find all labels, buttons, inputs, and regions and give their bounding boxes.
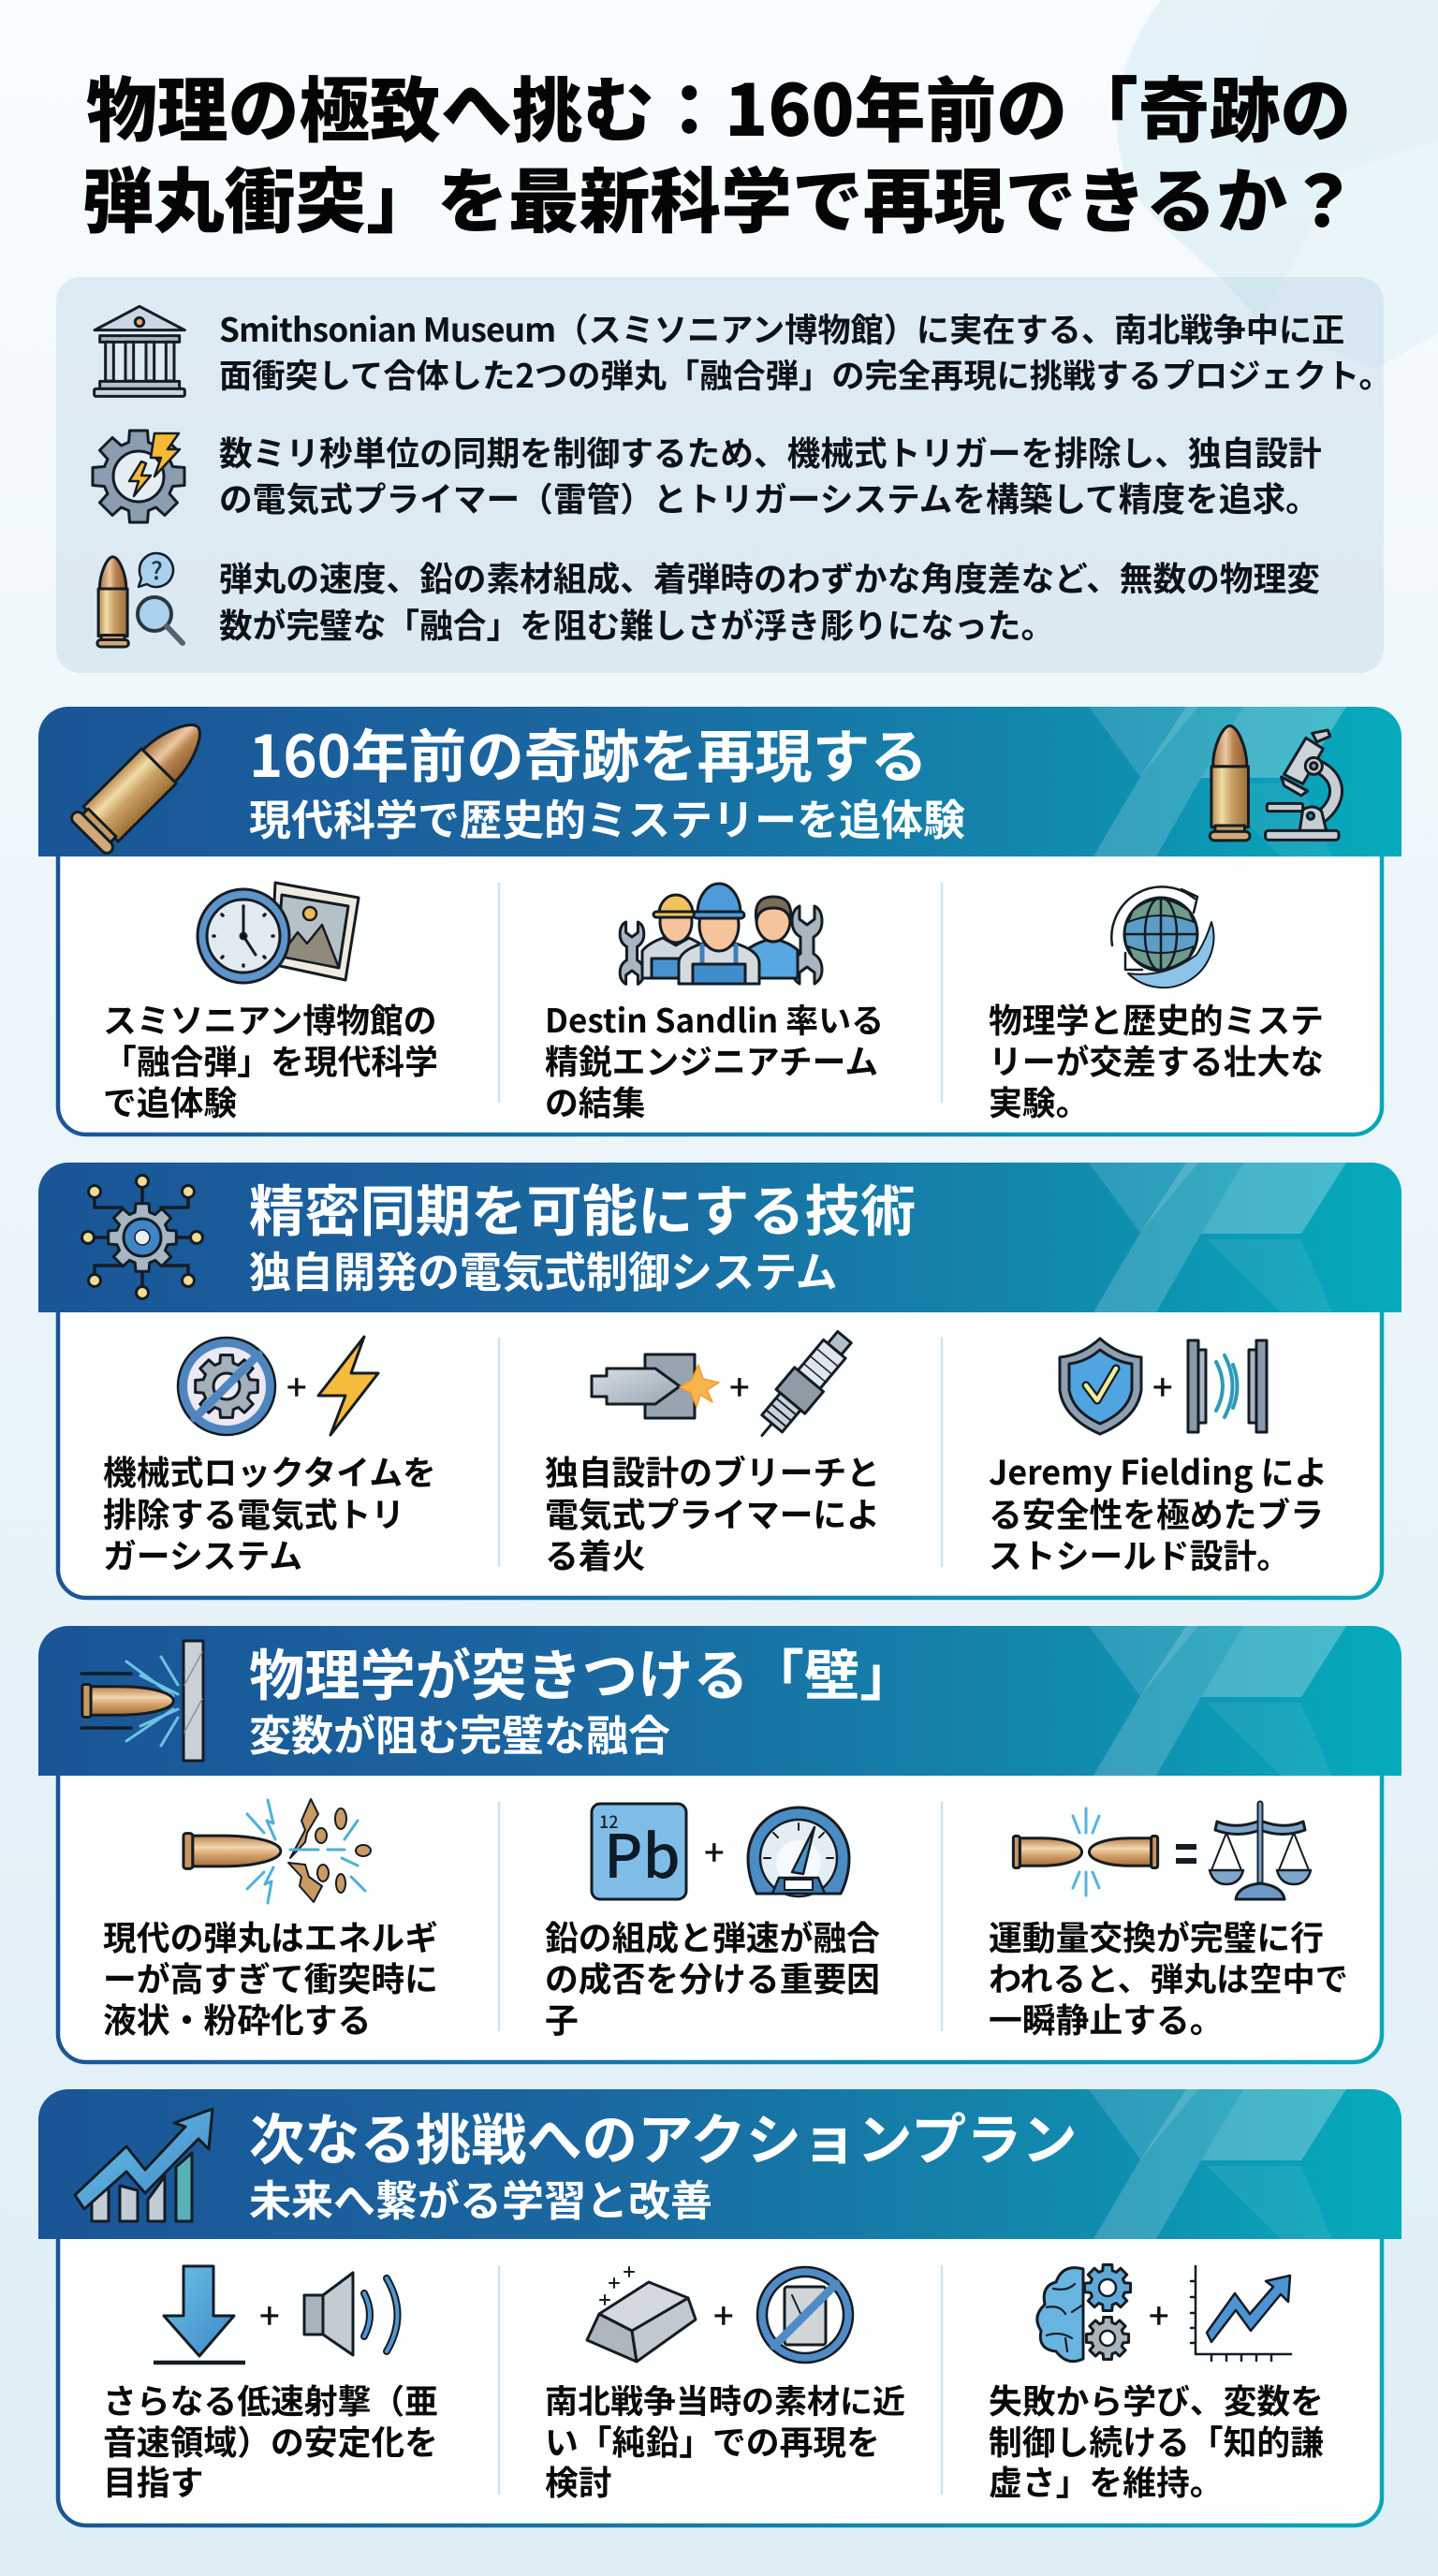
text block: 排除する電気式トリ [103, 1488, 404, 1537]
icon: brain gears plus chart: + [1149, 2288, 1169, 2339]
icon: down arrow plus speaker: + [259, 2288, 280, 2339]
text block: 音速領域）の安定化を [103, 2416, 438, 2465]
text block: 液状・粉砕化する [103, 1994, 371, 2042]
text block [103, 994, 438, 1125]
panel: section 2 [38, 1163, 1401, 1598]
icon: circuit gear [82, 1176, 202, 1299]
divider and body: column 1 [103, 883, 942, 1125]
icon: lead plus gauge: 12 [599, 1809, 619, 1834]
text block: 鉛の組成と弾速が融合 [545, 1911, 880, 1960]
text block: 失敗から学び、変数を [989, 2375, 1324, 2423]
text block [545, 2376, 905, 2505]
icon: colliding bullets equals balance [1013, 1804, 1311, 1899]
text block [989, 2375, 1324, 2505]
subheading: 変数が阻む完璧な融合 [249, 1702, 670, 1763]
icon: shattering bullet [183, 1799, 371, 1903]
heading: 物理学が突きつける「壁」 [249, 1632, 916, 1712]
text block: Jeremy Fielding によ [989, 1446, 1328, 1495]
heading: 次なる挑戦へのアクションプラン [249, 2096, 1078, 2176]
icon: breech plus spark plug: + [729, 1359, 750, 1411]
icon: lead plus gauge: Pb [604, 1809, 681, 1895]
text block: で追体験 [103, 1076, 237, 1125]
columns [103, 2265, 1324, 2505]
icon: lead ingot plus no sign: + [713, 2288, 734, 2339]
icon: clock and photo [198, 883, 359, 983]
text block: 南北戦争当時の素材に近 [545, 2376, 905, 2423]
icon: lead plus gauge [592, 1804, 849, 1899]
icon: bullet and question [97, 552, 183, 647]
text block: ガーシステム [103, 1530, 302, 1578]
text block: リーが交差する壮大な [989, 1035, 1324, 1084]
text block: 精鋭エンジニアチーム [545, 1035, 878, 1084]
icon: globe with arrows [1111, 886, 1213, 988]
text block [103, 2375, 438, 2505]
icon: lead plus gauge: + [704, 1824, 725, 1876]
text block: ストシールド設計。 [989, 1530, 1290, 1578]
column 2 [545, 884, 884, 1125]
icon: bullet and question: ? [151, 552, 163, 587]
text block: 子 [545, 1994, 579, 2042]
text block: project: 面衝突して合体した2つの弾丸「融合弾」の完全再現に挑戦するプロジェクト。 [219, 350, 1392, 398]
text block: 虚さ」を維持。 [989, 2456, 1224, 2505]
title: 物理の極致へ挑む：160年前の「奇跡の [86, 53, 1351, 156]
header band: section 3 [38, 1626, 1401, 1776]
text block: trigger: 数ミリ秒単位の同期を制御するため、機械式トリガーを排除し、独自設計 [219, 428, 1322, 476]
text block: 独自設計のブリーチと [545, 1446, 880, 1495]
icon: engineers [620, 884, 822, 984]
text block: variables: 弾丸の速度、鉛の素材組成、着弾時のわずかな角度差など、無数の物理変 [219, 553, 1320, 601]
text block: さらなる低速射撃（亜 [103, 2375, 438, 2423]
text block [545, 1911, 880, 2042]
icon: rising chart [75, 2109, 213, 2221]
text block: 検討 [545, 2456, 612, 2505]
icon: brain gears plus chart [1037, 2265, 1291, 2362]
heading: 160年前の奇跡を再現する [249, 710, 928, 794]
text block: る着火 [545, 1530, 645, 1578]
title: 弾丸衝突」を最新科学で再現できるか？ [82, 144, 1358, 247]
subheading: 現代科学で歴史的ミステリーを追体験 [249, 786, 965, 847]
icon: shield plus blast plates: + [1152, 1359, 1173, 1411]
header band: section 2 [38, 1163, 1401, 1312]
text block [545, 995, 884, 1125]
text block [989, 1911, 1348, 2042]
icon: museum [95, 306, 184, 396]
icon: no gear plus bolt: + [286, 1359, 307, 1411]
panel: section 4 [38, 2089, 1401, 2525]
columns [103, 1799, 1348, 2042]
text block: trigger [219, 428, 1322, 521]
text block [989, 994, 1324, 1125]
text block [545, 1446, 880, 1578]
text block [989, 1446, 1328, 1578]
text block: 制御し続ける「知的謙 [989, 2416, 1324, 2465]
text block: project: Smithsonian Museum（スミソニアン博物館）に実在する、南北戦争中に正 [219, 304, 1344, 352]
icon: no gear plus bolt [178, 1337, 378, 1435]
text block: ーが高すぎて衝突時に [103, 1953, 438, 2001]
panel: section 3 [38, 1626, 1401, 2062]
text block: 運動量交換が完璧に行 [989, 1911, 1324, 1960]
text block: 物理学と歴史的ミステ [989, 994, 1324, 1043]
text block: trigger: の電気式プライマー（雷管）とトリガーシステムを構築して精度を追求。 [219, 474, 1319, 521]
text block: 現代の弾丸はエネルギ [103, 1911, 438, 1960]
subheading: 未来へ繋がる学習と改善 [249, 2167, 712, 2228]
text block: の成否を分ける重要因 [545, 1953, 880, 2001]
icon: shield plus blast plates [1060, 1339, 1267, 1434]
icon: gear with lightning [93, 431, 184, 522]
text block: 一瞬静止する。 [989, 1994, 1224, 2042]
icon: down arrow plus speaker [154, 2266, 397, 2363]
text block: 「融合弾」を現代科学 [103, 1035, 438, 1084]
text block: い「純鉛」での再現を [545, 2416, 880, 2465]
icon: tilted bullet [69, 709, 216, 856]
text block: 目指す [103, 2456, 203, 2505]
panel: summary [56, 277, 1392, 673]
text block: 機械式ロックタイムを [103, 1446, 436, 1495]
text block: Destin Sandlin 率いる [545, 995, 884, 1043]
text block: スミソニアン博物館の [103, 994, 437, 1043]
text block [103, 1911, 438, 2042]
text block [103, 1446, 436, 1578]
text block: variables: 数が完璧な「融合」を阻む難しさが浮き彫りになった。 [219, 600, 1054, 648]
columns [103, 1325, 1328, 1578]
text block: project [219, 304, 1392, 398]
header band: section 1 [38, 707, 1401, 856]
subheading: 独自開発の電気式制御システム [249, 1238, 838, 1299]
icon: breech plus spark plug [592, 1325, 858, 1447]
text block: われると、弾丸は空中で [989, 1954, 1348, 2001]
text block: 実験。 [989, 1076, 1089, 1125]
text block: 電気式プライマーによ [545, 1488, 880, 1537]
icon: bullet hitting wall [81, 1641, 203, 1761]
text block: variables [219, 553, 1320, 648]
title [82, 53, 1358, 247]
column 3 [989, 886, 1324, 1125]
panel: section 1 [38, 707, 1401, 1134]
icon: lead ingot plus no sign [587, 2267, 853, 2363]
icon: bullet upright [1210, 725, 1250, 841]
heading: 精密同期を可能にする技術 [249, 1167, 916, 1248]
text block: る安全性を極めたブラ [989, 1488, 1324, 1537]
header band: section 4 [38, 2089, 1401, 2239]
icon: microscope [1266, 730, 1339, 840]
text block: の結集 [545, 1076, 645, 1125]
